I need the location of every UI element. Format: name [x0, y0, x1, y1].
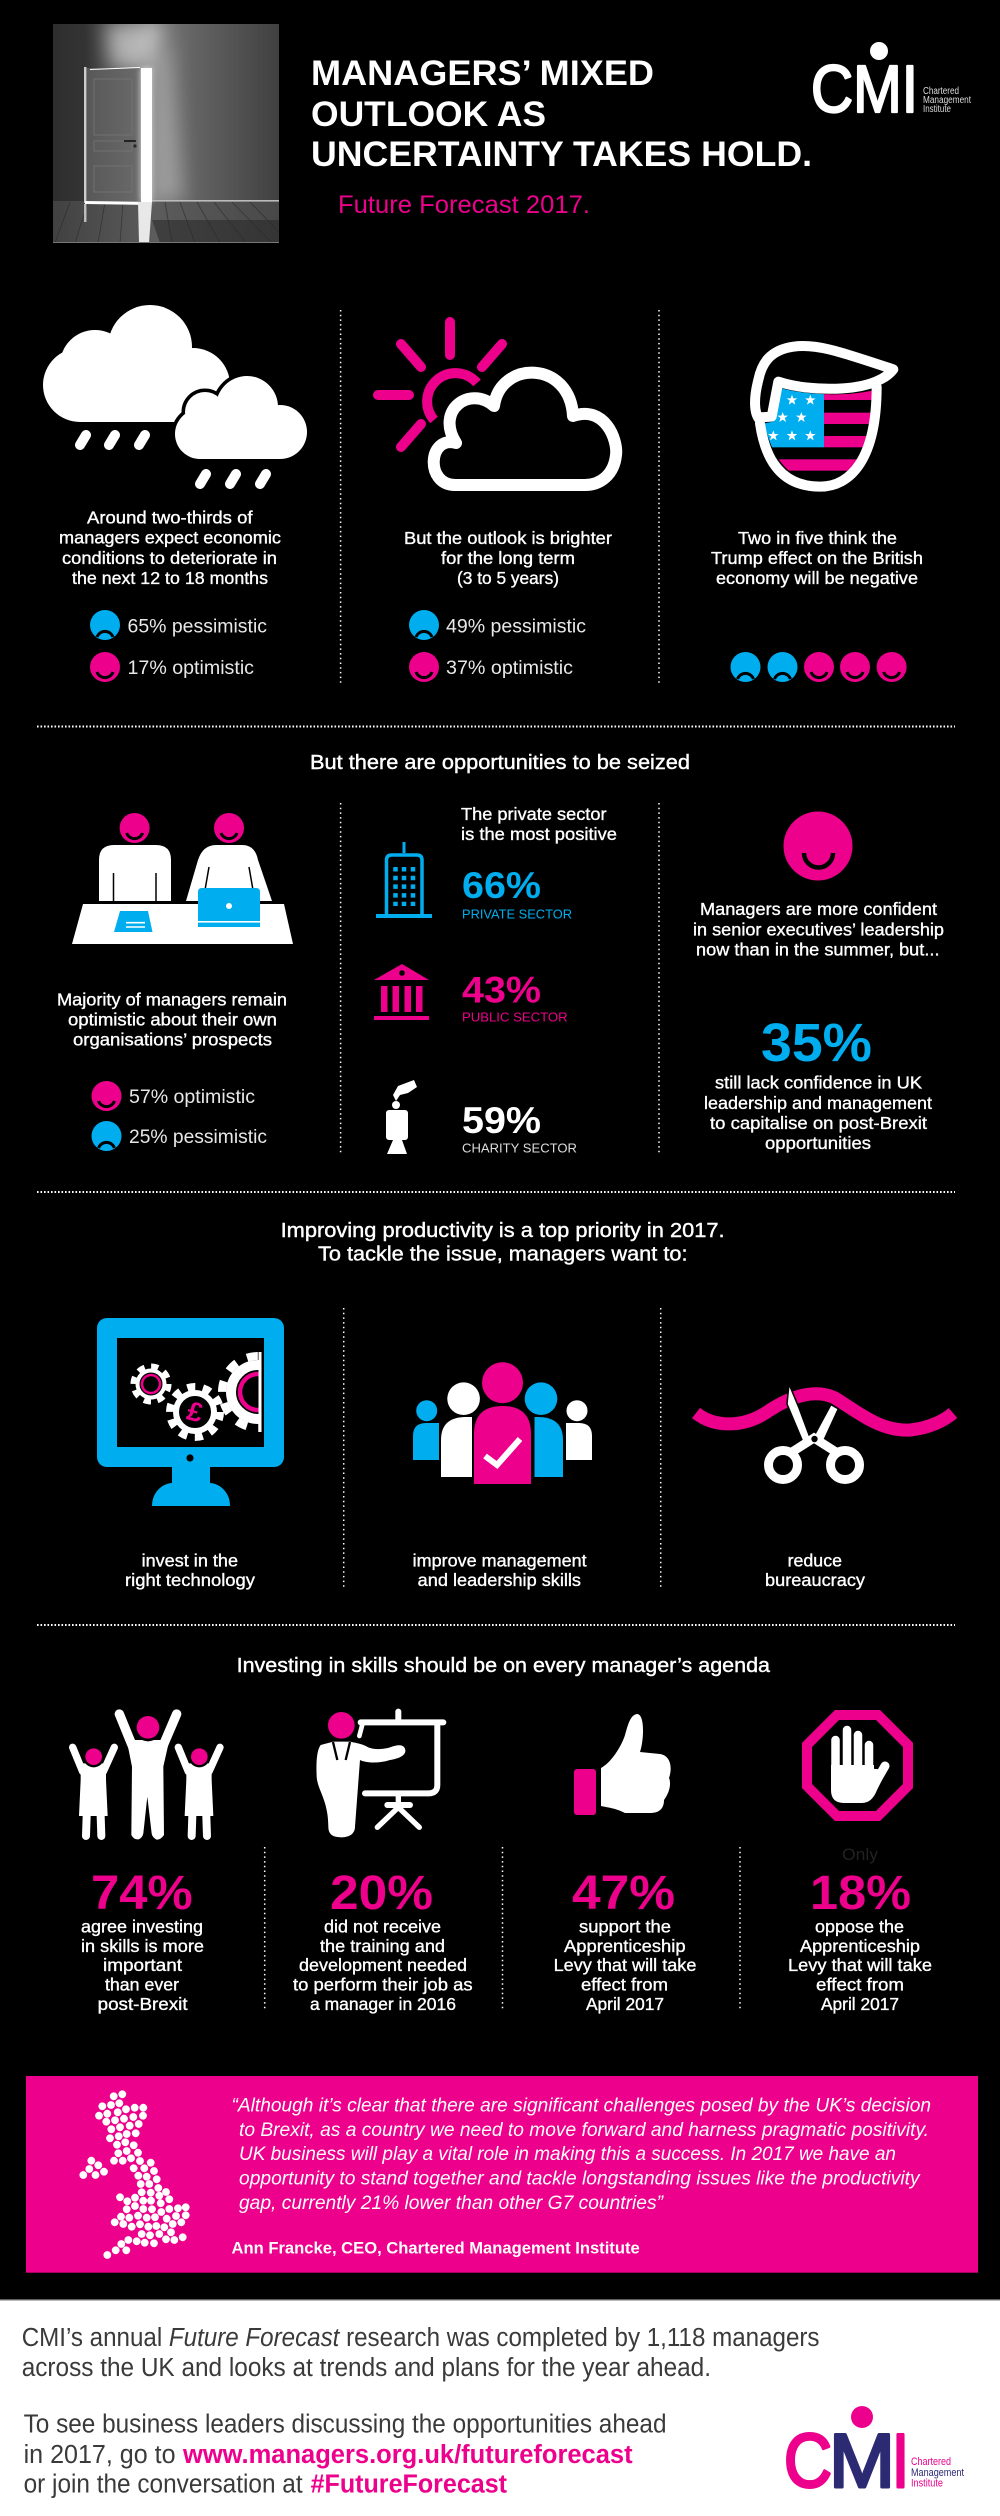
stat: 20%: development needed — [299, 1955, 467, 1975]
text: call to action: www.managers.org.uk/futureforecast — [182, 2441, 633, 2469]
text: brighter long term — [404, 528, 612, 588]
stat: 25% pessimistic: 25% pessimistic — [129, 1127, 267, 1148]
stat: 74% — [81, 1867, 204, 2014]
stat: 20%: did not receive — [324, 1917, 441, 1937]
text: reduce bureaucracy: reduce — [788, 1551, 842, 1571]
pictogram: two in five faces — [730, 652, 907, 682]
stat: 35% lack confidence: leadership and management — [704, 1093, 932, 1113]
header — [53, 24, 971, 243]
logo: CMI white: CMI — [811, 52, 918, 127]
text: Trump effect: Trump effect on the British — [711, 548, 923, 568]
title: MANAGERS’ MIXED — [311, 54, 654, 93]
stat: 18%: oppose the — [815, 1917, 904, 1937]
stat: 18%: 18% — [810, 1867, 911, 1920]
text: confident in senior executives: in senior executives’ leadership — [693, 920, 944, 940]
quote text: UK business will play a vital role in making this a success. In 2017 we have an — [239, 2144, 896, 2165]
text: two-thirds: conditions to deteriorate in — [62, 548, 277, 568]
photo: open door with light — [53, 24, 279, 243]
text: improve management: and leadership skills — [418, 1570, 581, 1590]
stat: 35% lack confidence: still lack confidence in UK — [715, 1073, 922, 1093]
icon: team with checkmark — [413, 1362, 592, 1484]
title: OUTLOOK AS — [311, 95, 546, 134]
text: confident in senior executives: Managers are more confident — [700, 899, 937, 919]
section: productivity — [97, 1220, 953, 1590]
stat: 59% charity sector: CHARITY SECTOR — [462, 1141, 577, 1156]
heading: skills: Investing in skills should be on every manager’s agenda — [237, 1655, 771, 1677]
quote text: opportunity to stand together and tackle longstanding issues like the productivity — [239, 2169, 921, 2190]
stat: 17% optimistic: 17% optimistic — [128, 658, 254, 679]
quote text: gap, currently 21% lower than other G7 countries” — [239, 2193, 665, 2214]
text: confident in senior executives — [693, 899, 944, 960]
stat: 66% private sector — [462, 865, 572, 922]
stat: 49% pessimistic: 49% pessimistic — [446, 617, 586, 638]
text: invest in technology — [125, 1551, 255, 1590]
stat: 74%: than ever — [105, 1975, 179, 1995]
icon: monitor with gears: £ — [184, 1396, 206, 1428]
quote text — [232, 2096, 931, 2214]
stat: 65% pessimistic — [90, 610, 267, 640]
heading: productivity — [281, 1220, 725, 1266]
stat: 43% public sector — [462, 970, 568, 1025]
stat: 37% optimistic — [409, 652, 573, 682]
text: Trump effect: economy will be negative — [716, 568, 918, 588]
logo: CMI white: Institute — [923, 104, 951, 115]
text: majority of managers: optimistic about their own — [68, 1010, 277, 1030]
text: about the research: across the UK and looks at trends and plans for the year ahead. — [22, 2354, 711, 2382]
stat: 74%: in skills is more — [81, 1936, 204, 1956]
stat: 20%: a manager in 2016 — [310, 1994, 456, 2014]
text: invest in technology: invest in the — [142, 1551, 238, 1571]
quote text: “Although it’s clear that there are significant challenges posed by the UK’s decision — [232, 2096, 931, 2117]
stat: 47%: Levy that will take — [554, 1955, 696, 1975]
text: reduce bureaucracy: bureaucracy — [765, 1570, 865, 1590]
stat: 47%: support the — [579, 1917, 671, 1937]
stat: 35% lack confidence: 35% — [761, 1013, 872, 1073]
text: two-thirds: managers expect economic — [59, 528, 281, 548]
text: call to action — [24, 2411, 667, 2499]
stat: 57% optimistic: 57% optimistic — [129, 1087, 255, 1108]
title — [311, 54, 812, 174]
text: majority of managers: Majority of managers remain — [57, 990, 287, 1010]
text: two-thirds: the next 12 to 18 months — [72, 568, 268, 588]
section: opportunities — [57, 752, 944, 1156]
stat: 18%: effect from — [816, 1975, 904, 1995]
stat: 17% optimistic — [90, 652, 254, 682]
icon: office building — [376, 842, 432, 918]
logo: CMI colour: C — [784, 2419, 832, 2504]
logo: CMI colour: I — [892, 2419, 909, 2504]
stat: 65% pessimistic: 65% pessimistic — [128, 617, 267, 638]
stat: 66% private sector: 66% — [462, 865, 541, 906]
text: improve management — [413, 1551, 587, 1590]
stat: 57% optimistic — [92, 1081, 255, 1111]
stat: 47%: Apprenticeship — [564, 1936, 686, 1956]
text: call to action: in 2017, go to — [24, 2441, 176, 2469]
text: call to action: or join the conversation at — [24, 2471, 303, 2499]
stat: 18%: April 2017 — [821, 1994, 899, 2014]
text: majority of managers: organisations’ prospects — [73, 1030, 272, 1050]
section: economic outlook — [43, 305, 923, 684]
icon: presenter at flip chart — [316, 1712, 443, 1837]
stat: 35% lack confidence — [704, 1013, 932, 1153]
text: private sector most positive: is the most positive — [461, 824, 617, 844]
icon: family with raised arms — [73, 1713, 220, 1840]
text: confident in senior executives: now than in the summer, but... — [696, 940, 940, 960]
stat: 59% charity sector — [462, 1100, 577, 1156]
text: brighter long term: (3 to 5 years) — [457, 568, 559, 588]
logo: CMI white — [811, 41, 971, 127]
text: reduce bureaucracy — [765, 1551, 865, 1590]
stat: 43% public sector: PUBLIC SECTOR — [462, 1010, 568, 1025]
stat: 20%: to perform their job as — [293, 1975, 473, 1995]
icon: charity collection box — [386, 1080, 417, 1154]
heading: productivity: Improving productivity is a top priority in 2017. — [281, 1220, 725, 1242]
stat: 74%: 74% — [91, 1867, 193, 1920]
text: majority of managers — [57, 990, 287, 1050]
stat: 20% — [293, 1867, 473, 2014]
stat: 35% lack confidence: opportunities — [765, 1133, 871, 1153]
stat: 47%: 47% — [572, 1867, 675, 1920]
text: brighter long term: for the long term — [441, 548, 575, 568]
icon: sun and cloud — [378, 322, 616, 485]
stat: 59% charity sector: 59% — [462, 1100, 541, 1141]
icon: large smiley — [784, 812, 852, 880]
stat: 20%: the training and — [320, 1936, 445, 1956]
icon: scissors cutting ribbon — [696, 1384, 953, 1480]
footer — [0, 2300, 1000, 2516]
text: private sector most positive: The private sector — [461, 804, 607, 824]
stat: 47%: effect from — [581, 1975, 668, 1995]
heading: productivity: To tackle the issue, managers want to: — [318, 1244, 688, 1266]
text: invest in technology: right technology — [125, 1570, 255, 1590]
stat: 43% public sector: 43% — [462, 970, 541, 1011]
quote attribution: Ann Francke, CEO, Chartered Management Institute — [232, 2238, 640, 2257]
text: two-thirds — [59, 508, 281, 588]
panel: CEO quote — [26, 2076, 978, 2273]
logo: CMI white: Management — [923, 95, 971, 106]
text: improve management: improve management — [413, 1551, 587, 1571]
logo: CMI white: Chartered — [923, 86, 959, 97]
quote text: to Brexit, as a country we need to move forward and harness pragmatic positivity. — [239, 2120, 929, 2141]
section: skills — [73, 1655, 932, 2014]
stat: 49% pessimistic — [409, 610, 586, 640]
logo: CMI colour: Institute — [911, 2478, 943, 2490]
text: about the research — [22, 2324, 819, 2382]
stat: 18%: Levy that will take — [788, 1955, 932, 1975]
map: UK made of dots — [79, 2090, 190, 2259]
stat: 37% optimistic: 37% optimistic — [446, 658, 573, 679]
icon: monitor with gears — [97, 1318, 294, 1506]
icon: thumbs up — [574, 1714, 671, 1815]
stat: 47%: April 2017 — [586, 1994, 664, 2014]
text: call to action: #FutureForecast — [311, 2471, 507, 2499]
icon: managers at desk — [72, 813, 293, 944]
logo: CMI colour — [784, 2406, 964, 2504]
logo: CMI colour: Chartered — [911, 2456, 951, 2468]
icon: Trump face with flag — [755, 346, 893, 487]
heading: opportunities: But there are opportunities to be seized — [310, 752, 690, 774]
stat: 20%: 20% — [330, 1867, 433, 1920]
text: about the research: CMI’s annual Future Forecast research was completed by 1,118 managers — [22, 2324, 819, 2352]
stat: 18%: Apprenticeship — [800, 1936, 920, 1956]
text: Trump effect: Two in five think the — [738, 528, 897, 548]
stat: 66% private sector: PRIVATE SECTOR — [462, 907, 572, 922]
stat: 18% — [788, 1867, 932, 2014]
text: private sector most positive — [461, 804, 617, 844]
stat: 25% pessimistic — [92, 1121, 267, 1151]
title: UNCERTAINTY TAKES HOLD. — [311, 135, 812, 174]
icon: public building — [374, 964, 429, 1020]
stat: 74%: post-Brexit — [98, 1994, 188, 2014]
logo: CMI colour: Management — [911, 2467, 964, 2479]
icon: stop sign with hand — [807, 1715, 908, 1816]
text: two-thirds: Around two-thirds of — [87, 508, 253, 528]
stat: 35% lack confidence: to capitalise on post-Brexit — [710, 1113, 927, 1133]
logo: CMI colour: M — [829, 2419, 895, 2504]
text: call to action: To see business leaders discussing the opportunities ahead — [24, 2411, 667, 2439]
stat: 74%: important — [103, 1955, 182, 1975]
stat: 74%: agree investing — [81, 1917, 203, 1937]
icon: rain clouds — [43, 305, 307, 484]
text: Trump effect — [711, 528, 923, 588]
stat: 47% — [554, 1867, 696, 2014]
text: brighter long term: But the outlook is brighter — [404, 528, 612, 548]
label: only: Only — [842, 1845, 879, 1864]
subtitle: Future Forecast 2017. — [338, 191, 590, 219]
